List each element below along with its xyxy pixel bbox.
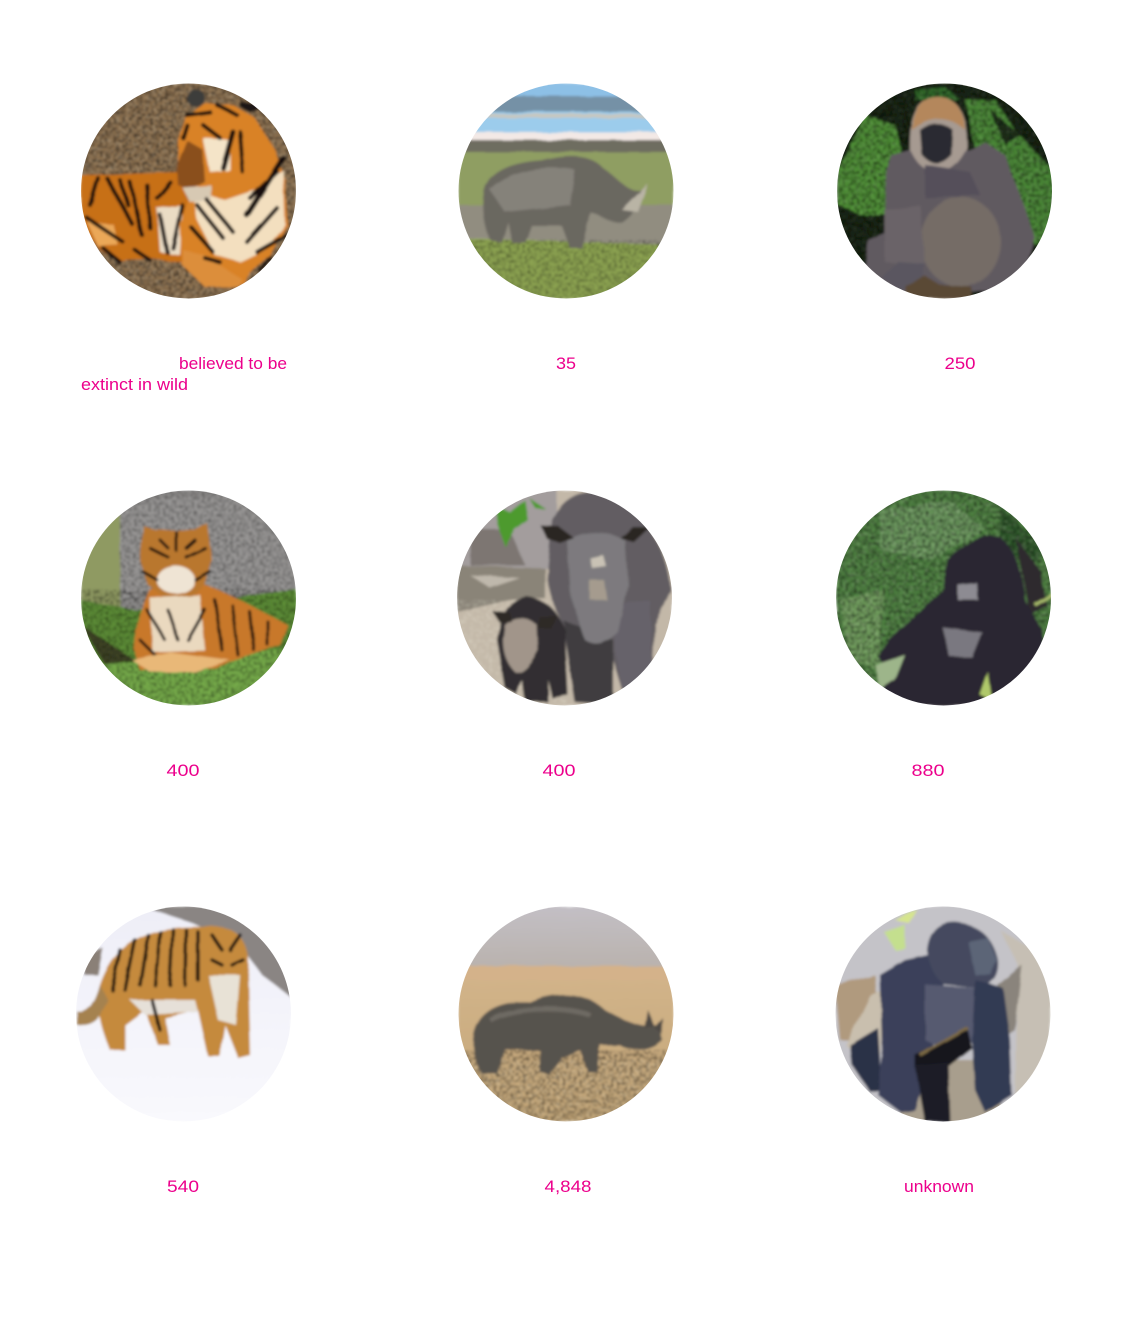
label: unknown: unknown — [904, 1178, 974, 1196]
panel: rhino, 400 — [457, 490, 673, 780]
photo: Siberian tiger walking in snow — [76, 906, 291, 1079]
photo: gorilla standing by a rock — [835, 906, 1051, 1122]
panel: tiger, 400 — [81, 490, 297, 780]
label: believed to be extinct in wild — [81, 355, 287, 394]
label: 400: 400 — [542, 762, 576, 780]
label: 880: 880 — [912, 762, 944, 780]
panel: rhino, 4,848 — [458, 906, 674, 1196]
panel: tiger, 540 — [76, 906, 292, 1196]
infographic grid of nine animal photos with population labels — [76, 84, 1052, 1194]
label: 540: 540 — [167, 1178, 199, 1196]
photo: rhino mother and calf — [457, 490, 673, 706]
photo: dark gorilla sitting in green foliage — [836, 490, 1052, 706]
label: 250: 250 — [944, 355, 976, 373]
photo: rhino on grass by a lake — [458, 83, 674, 300]
label: believed to be extinct in wild: extinct in wild — [81, 376, 188, 394]
label: 4,848: 4,848 — [544, 1178, 592, 1196]
panel: tiger, believed to be extinct in wild — [81, 83, 297, 394]
photo: tiger lying on brown leaf litter — [81, 83, 297, 299]
panel: gorilla, 250 — [837, 83, 1053, 373]
panel: gorilla, 880 — [836, 490, 1052, 780]
label: 35: 35 — [556, 355, 576, 373]
photo: black rhino on dry savanna — [458, 906, 674, 1122]
photo: gorilla sitting among foliage — [837, 83, 1053, 299]
panel: gorilla, unknown — [835, 906, 1051, 1196]
label: believed to be extinct in wild: believed to be — [179, 355, 287, 373]
photo: tiger resting by a rock on grass — [81, 490, 297, 706]
label: 400: 400 — [166, 762, 200, 780]
panel: rhino, 35 — [458, 83, 674, 373]
